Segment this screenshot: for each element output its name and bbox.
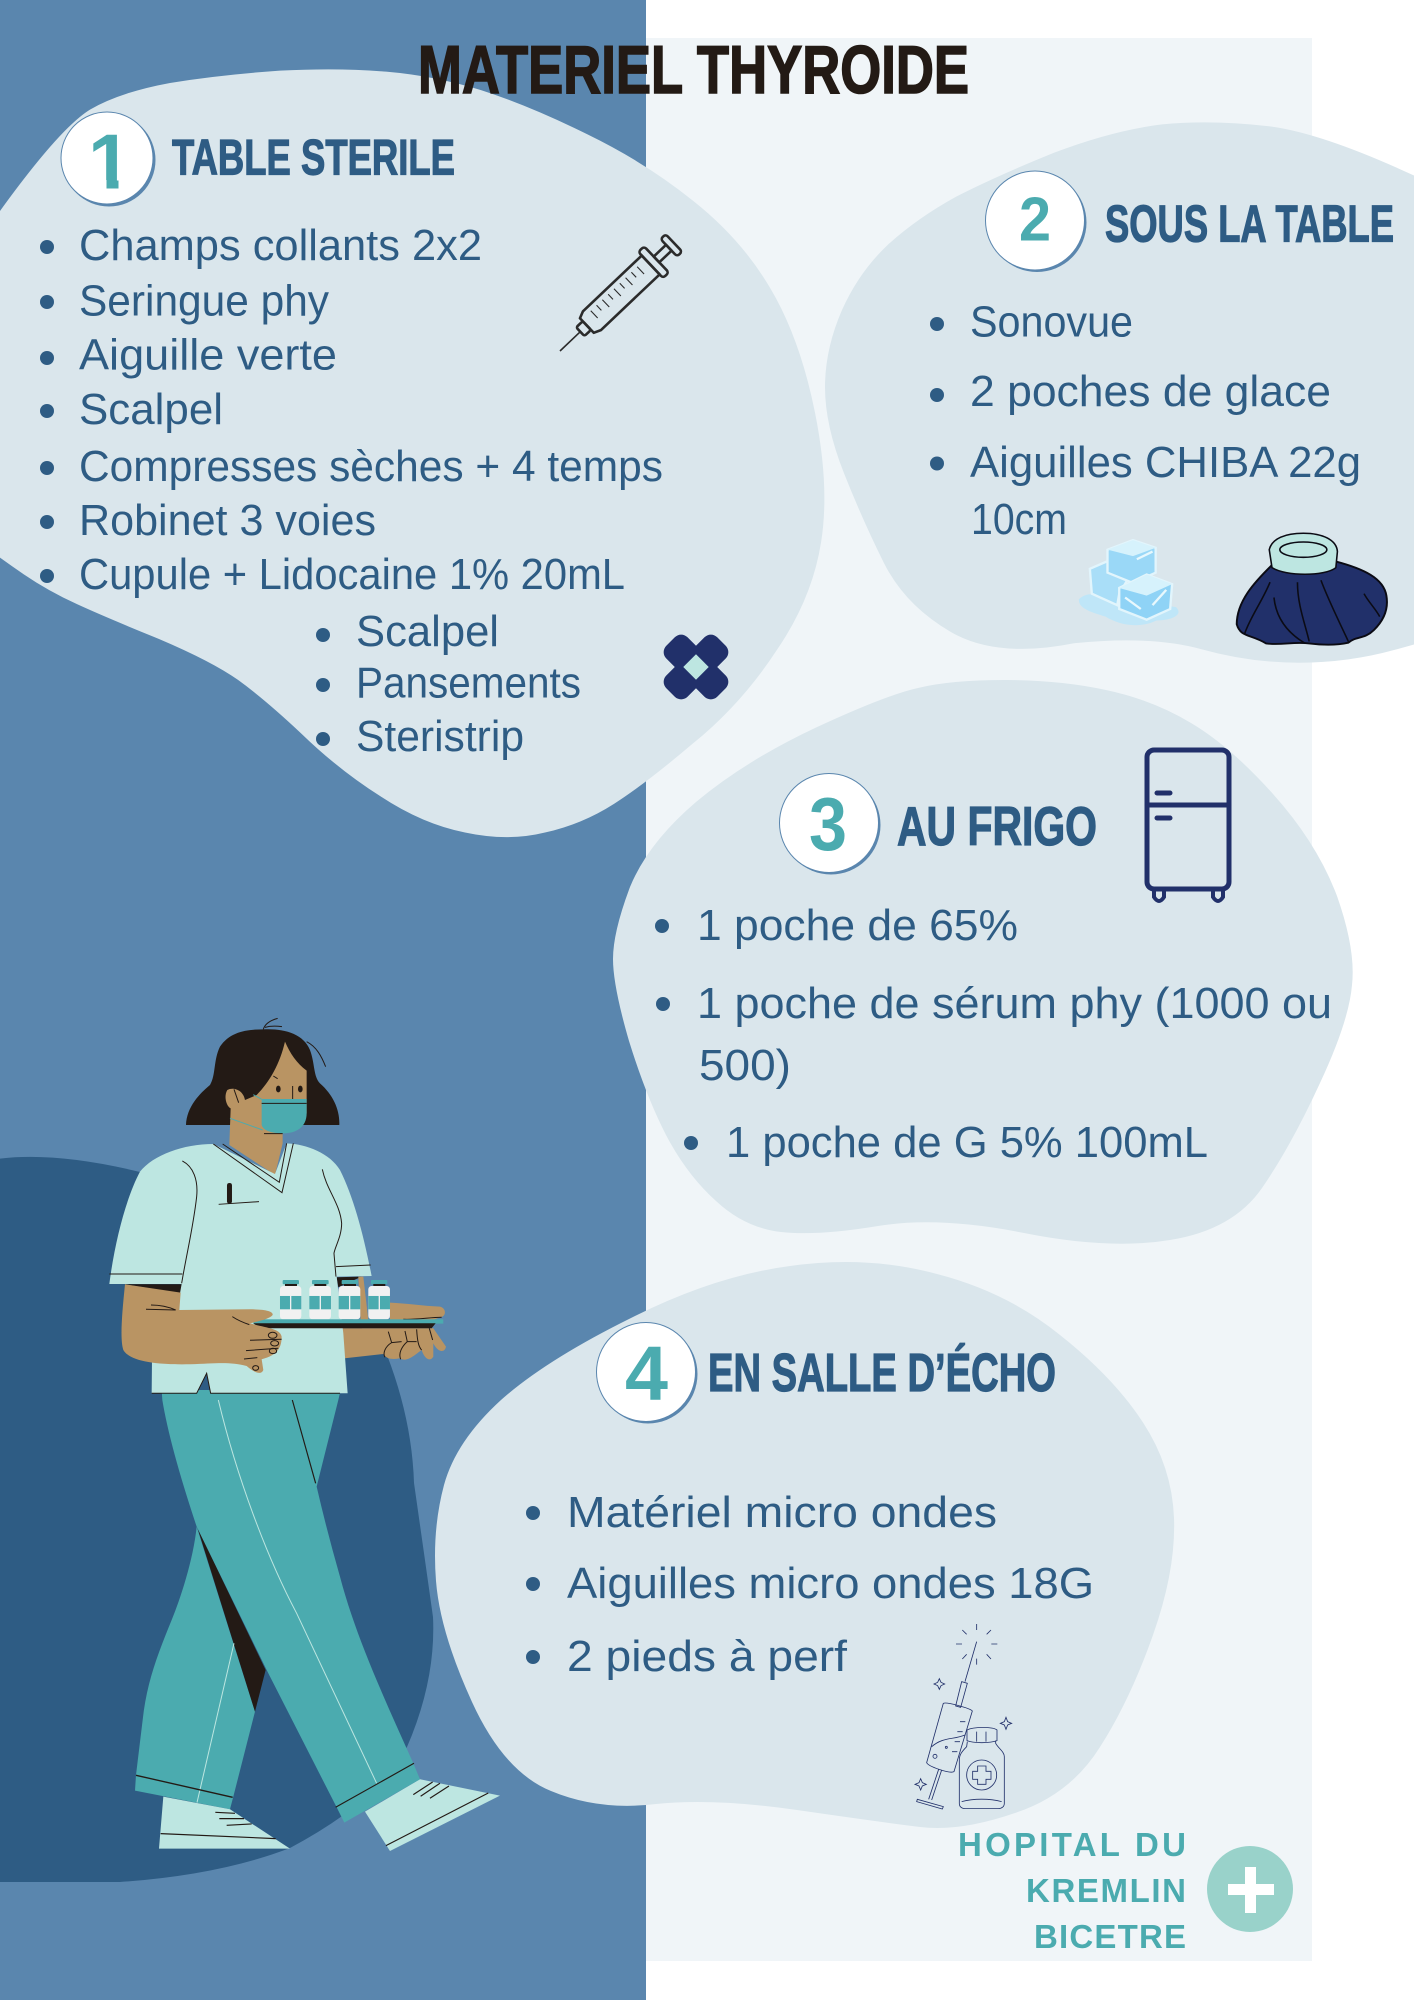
near arm — [122, 1284, 282, 1373]
number badge 4: 4 — [625, 1331, 668, 1417]
dark blue blob behind nurse — [0, 1157, 433, 1882]
upper body — [109, 1018, 446, 1393]
list: echo room items: Aiguilles micro ondes 18G — [567, 1559, 1094, 1608]
panel: blob 3 au frigo — [613, 680, 1353, 1244]
number badge 1: 1 — [88, 118, 131, 206]
heading: en salle d'echo: EN SALLE D’ÉCHO — [708, 1343, 1056, 1403]
number badge 1 — [61, 112, 156, 206]
list: fridge items: 500) — [699, 1041, 791, 1090]
icon: fridge — [1147, 750, 1229, 901]
list: sterile items: Robinet 3 voies — [79, 496, 376, 545]
list: sterile items — [40, 221, 663, 599]
list: under-table items: Sonovue — [970, 298, 1133, 346]
icon: syringe — [548, 230, 686, 364]
panel: blob 4 en salle d'echo — [435, 1262, 1174, 1828]
title: MATERIEL THYROIDE — [418, 32, 969, 108]
nurse illustration — [109, 1018, 500, 1851]
panel: blob 2 sous la table — [825, 122, 1414, 663]
list: under-table items: 10cm — [971, 495, 1067, 544]
list: sterile items: Champs collants 2x2 — [79, 221, 482, 270]
list: fridge items: 1 poche de 65% — [697, 901, 1018, 950]
hospital name: HOPITAL DU — [958, 1826, 1186, 1863]
list: echo room items: Matériel micro ondes — [567, 1488, 997, 1537]
list: dressing items — [316, 607, 581, 761]
icon: vial and syringe — [915, 1624, 1012, 1809]
icon: ice cubes — [1079, 540, 1179, 625]
hospital name: KREMLIN — [1026, 1872, 1186, 1909]
list: dressing items: Pansements — [356, 658, 581, 708]
number badge 2: 2 — [1019, 186, 1051, 254]
tray — [253, 1319, 443, 1328]
list: dressing items: Scalpel — [356, 607, 499, 656]
list: sterile items: Scalpel — [79, 385, 223, 434]
vials on tray — [280, 1280, 390, 1319]
list: echo room items — [526, 1488, 1094, 1681]
trousers and shoes — [135, 1390, 500, 1851]
list: under-table items: Aiguilles CHIBA 22g — [970, 438, 1361, 487]
icon: ice bag — [1237, 533, 1387, 645]
list: under-table items: 2 poches de glace — [970, 367, 1331, 416]
icon: bandage — [660, 631, 732, 703]
list: under-table items — [930, 298, 1361, 544]
number badge 2 — [986, 171, 1086, 272]
hospital name — [958, 1826, 1186, 1955]
list: fridge items: 1 poche de G 5% 100mL — [726, 1118, 1208, 1167]
list: fridge items: 1 poche de sérum phy (1000 ou — [697, 979, 1332, 1028]
list: dressing items: Steristrip — [356, 712, 524, 761]
panel: blob 1 table sterile — [0, 69, 824, 837]
number badge 3 — [780, 774, 880, 874]
list: sterile items: Compresses sèches + 4 temps — [79, 442, 663, 491]
icon: hospital plus — [1207, 1846, 1293, 1932]
list: fridge items — [655, 901, 1332, 1167]
number badge 4 — [596, 1322, 698, 1424]
list: sterile items: Cupule + Lidocaine 1% 20mL — [79, 550, 625, 599]
number badge 3: 3 — [809, 782, 847, 866]
heading: table sterile: TABLE STERILE — [172, 130, 455, 186]
list: echo room items: 2 pieds à perf — [567, 1632, 848, 1681]
list: sterile items: Aiguille verte — [79, 330, 337, 380]
hospital name: BICETRE — [1034, 1918, 1186, 1955]
heading: au frigo: AU FRIGO — [897, 795, 1097, 857]
list: sterile items: Seringue phy — [79, 276, 329, 326]
